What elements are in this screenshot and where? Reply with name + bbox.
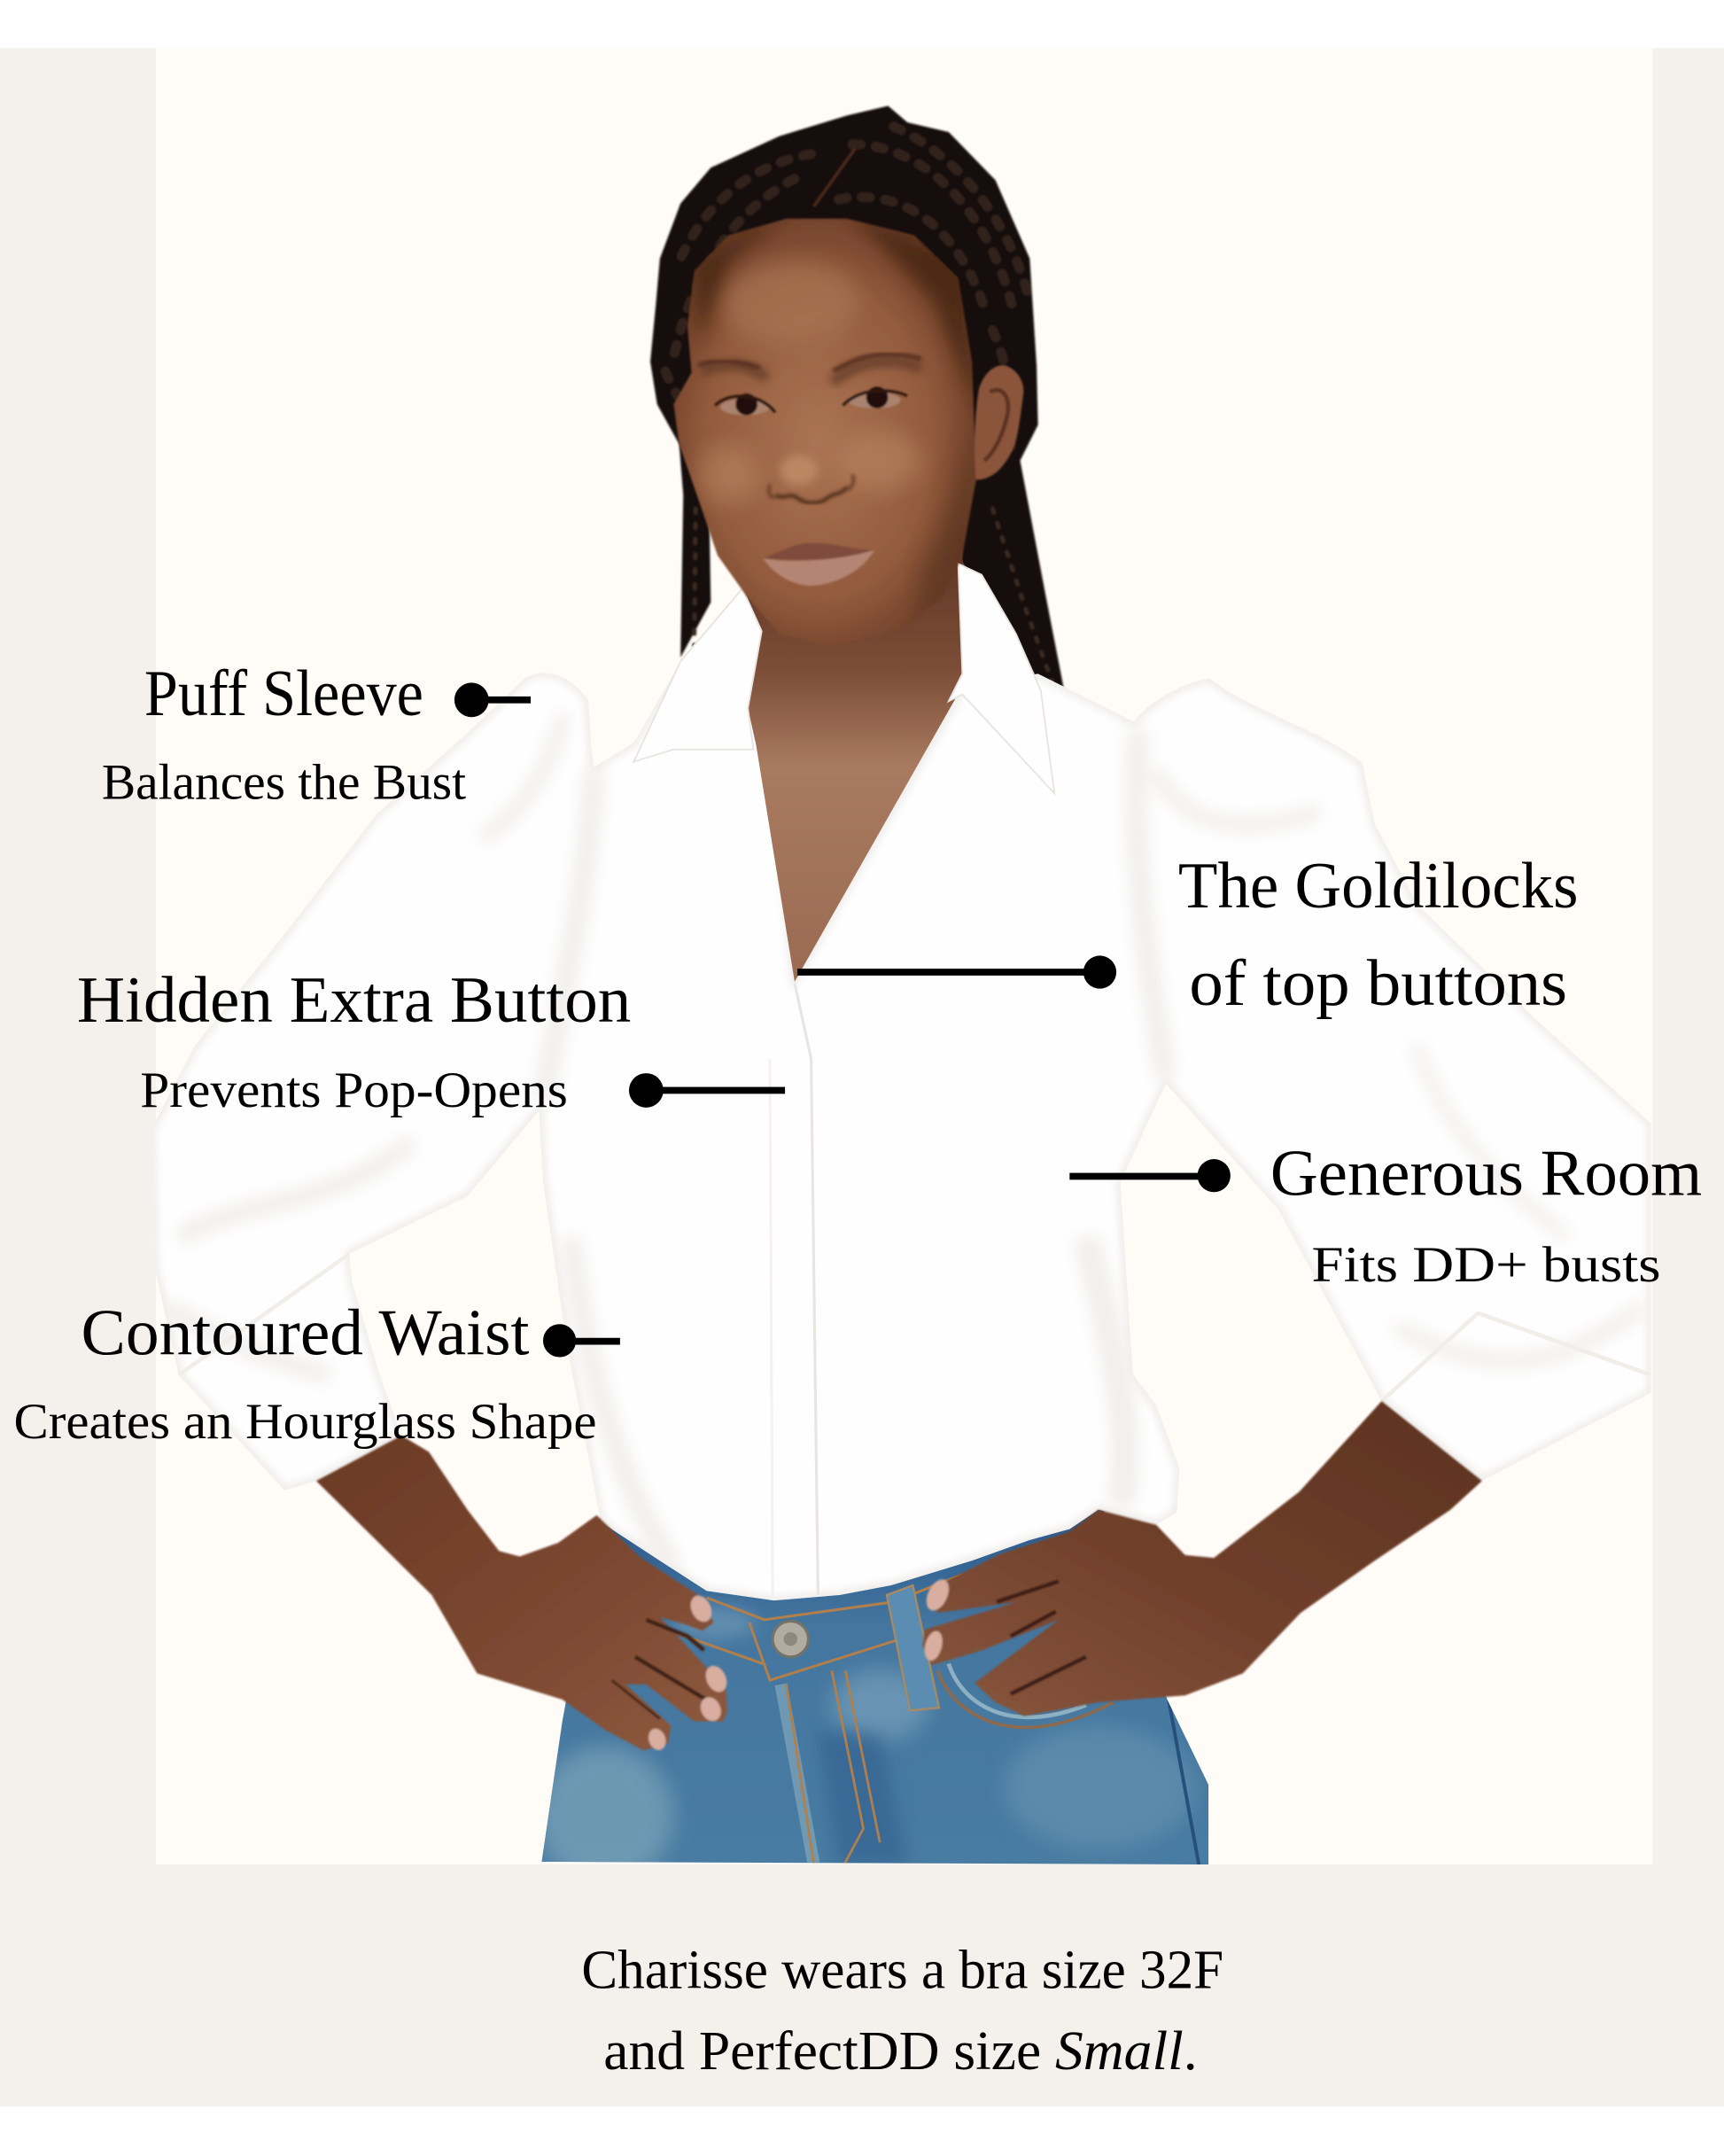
ear: [975, 365, 1023, 480]
caption: [581, 1941, 1223, 2082]
lips: [763, 543, 874, 560]
shirt collar: [633, 564, 1054, 793]
caption: Charisse wears a bra size 32F: [581, 1941, 1223, 2001]
model figure: [151, 105, 1651, 1884]
callout: Puff Sleeve: Balances the Bust: [102, 755, 466, 811]
callout: The Goldilocks of top buttons: The Goldilocks: [1178, 850, 1579, 922]
callout: Generous Room: [1069, 1137, 1702, 1293]
eyes: [720, 399, 770, 416]
fingernails: [922, 1576, 953, 1614]
fingernails: [687, 1592, 716, 1625]
brow shadow: [701, 361, 921, 382]
callout: Contoured Waist: Contoured Waist: [82, 1296, 530, 1369]
callout: The Goldilocks of top buttons: [797, 850, 1579, 1020]
left cuff seam: [179, 1254, 349, 1375]
eyebrows: [698, 361, 760, 369]
fly placket edge: [780, 1685, 814, 1864]
callout: Generous Room: Fits DD+ busts: [1311, 1237, 1661, 1293]
shirt soft shading: [151, 605, 1651, 1600]
hair and braids: [650, 105, 1064, 690]
right forearm and hand: [921, 1401, 1482, 1716]
pocket seam: [937, 1670, 1114, 1727]
white shirt: [151, 605, 1651, 1600]
callout: Hidden Extra Button: Prevents Pop-Opens: [140, 1062, 568, 1118]
jeans: [536, 1498, 1208, 1884]
right side seam: [1169, 1700, 1199, 1864]
waistband stitching: [646, 1575, 962, 1680]
neck and chest skin: [742, 550, 967, 982]
callout: Contoured Waist: Creates an Hourglass Shape: [14, 1394, 596, 1450]
callout: Puff Sleeve: Puff Sleeve: [144, 658, 423, 730]
left forearm and hand: [316, 1436, 731, 1753]
photo panel: [156, 48, 1652, 1864]
callout: Generous Room: Generous Room: [1270, 1137, 1702, 1210]
jeans button: [773, 1621, 808, 1657]
face: [673, 214, 1023, 646]
belt loop: [887, 1585, 939, 1710]
button placket: [795, 983, 818, 1595]
callout: Hidden Extra Button: [77, 964, 785, 1118]
caption: and PerfectDD size Small.: [603, 2021, 1198, 2082]
nose: [780, 455, 818, 486]
callout: Puff Sleeve: [102, 658, 531, 811]
fly stitching: [787, 1670, 880, 1864]
callout: The Goldilocks of top buttons: of top buttons: [1189, 947, 1567, 1020]
right cuff seam: [1382, 1313, 1651, 1401]
callout: Contoured Waist: [14, 1296, 620, 1450]
callout: Hidden Extra Button: Hidden Extra Button: [77, 964, 631, 1037]
